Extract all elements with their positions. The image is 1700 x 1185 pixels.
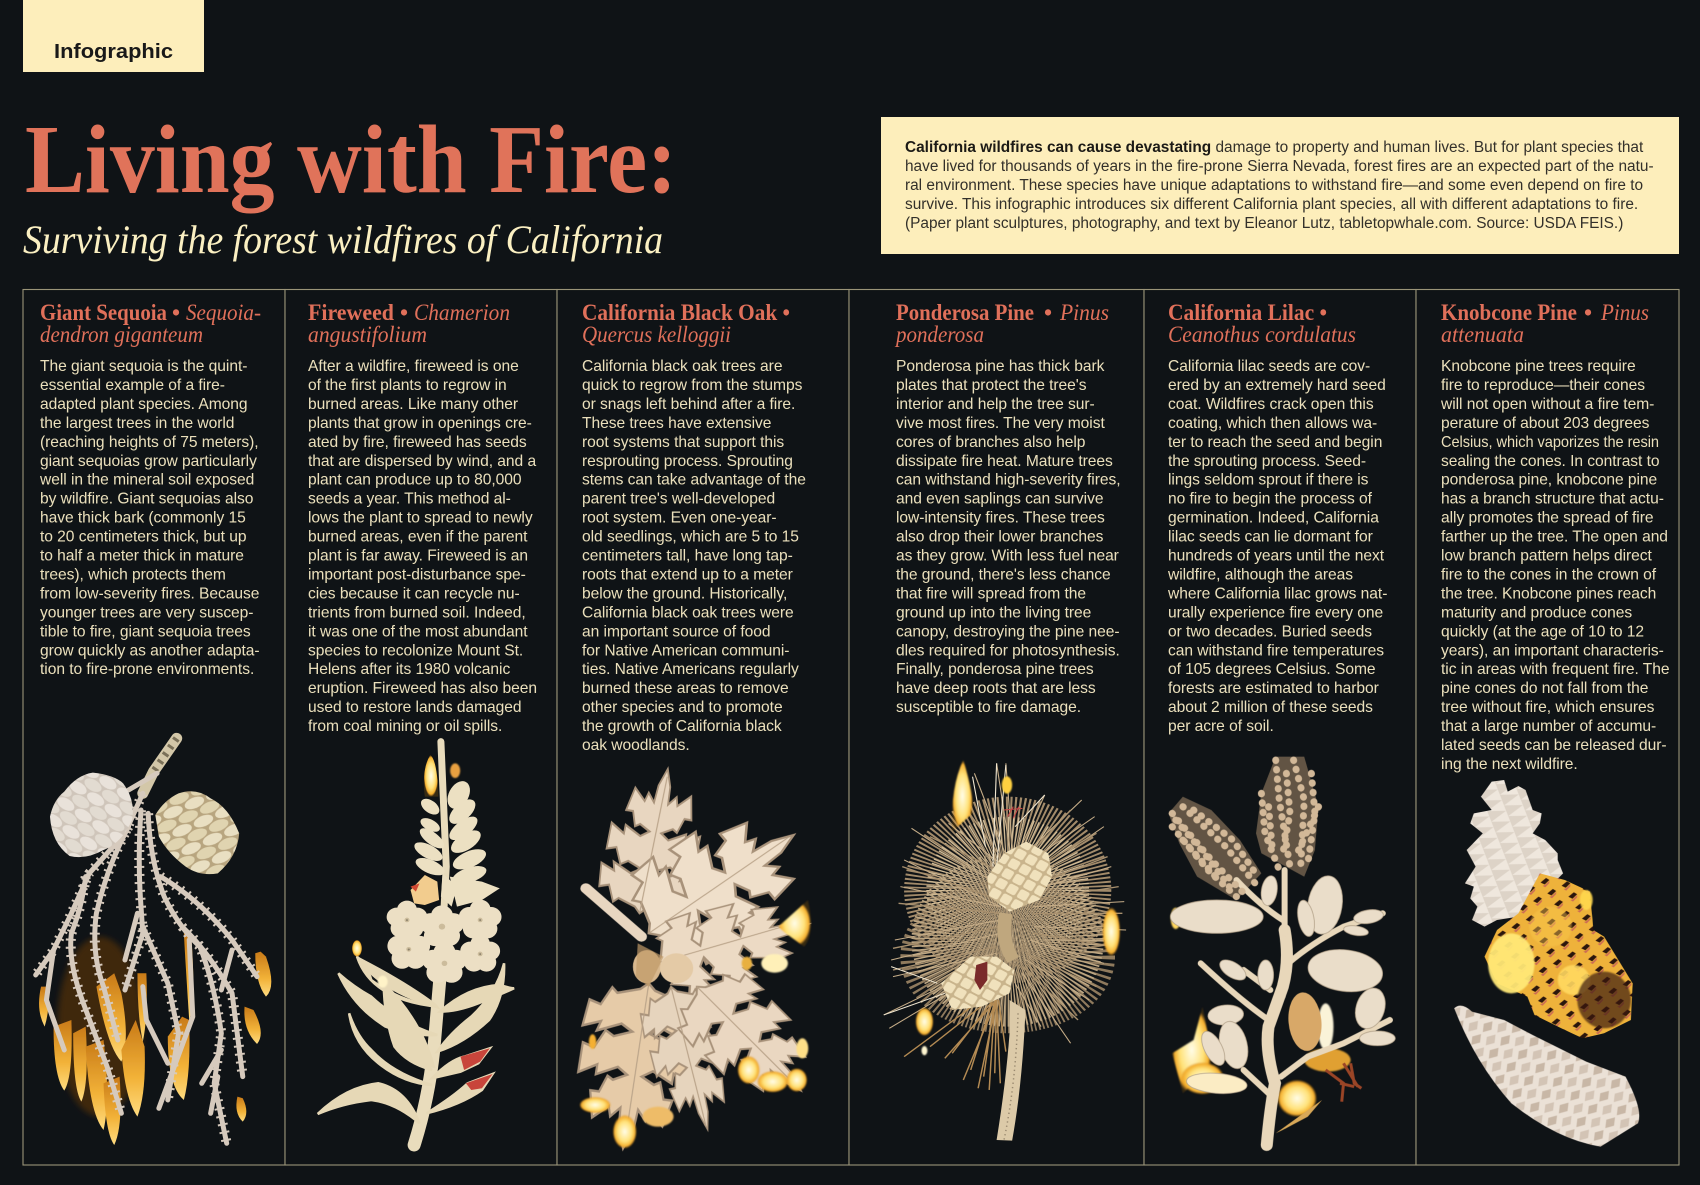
text: knobcone pine: that a large number of accumu- bbox=[1441, 718, 1656, 735]
heading: ponderosa pine: Ponderosa Pine bbox=[896, 300, 1034, 325]
text: california lilac: urally experience fire every one bbox=[1168, 604, 1383, 621]
text: giant sequoia: younger trees are very suscep- bbox=[40, 604, 253, 621]
text: ponderosa pine: as they grow. With less fuel near bbox=[896, 548, 1119, 564]
text: knobcone pine: will not open without a fire tem- bbox=[1440, 396, 1654, 413]
text: ponderosa pine: dles required for photosynthesis. bbox=[896, 642, 1120, 659]
text: giant sequoia: essential example of a fire- bbox=[40, 377, 225, 394]
text: california black oak: below the ground. Historically, bbox=[582, 585, 787, 602]
text: ponderosa pine: can withstand high-severity fires, bbox=[896, 472, 1121, 489]
text: california lilac: coat. Wildfires crack open this bbox=[1168, 396, 1374, 413]
heading: giant sequoia: Sequoia- bbox=[186, 300, 261, 325]
text: giant sequoia: the largest trees in the world bbox=[40, 415, 234, 432]
text: giant sequoia: have thick bark (commonly 15 bbox=[40, 510, 246, 527]
heading: knobcone pine: Knobcone Pine bbox=[1441, 300, 1577, 325]
text: california black oak: California black oak trees were bbox=[582, 604, 794, 621]
text: ponderosa pine: cores of branches also help bbox=[896, 434, 1086, 451]
text: california lilac: the sprouting process. Seed- bbox=[1168, 453, 1366, 470]
text: giant sequoia: tion to fire-prone environments. bbox=[40, 661, 254, 678]
text: knobcone pine: Celsius, which vaporizes the resin bbox=[1441, 434, 1659, 451]
text: fireweed: ated by fire, fireweed has seeds bbox=[308, 434, 527, 451]
text: giant sequoia: to 20 centimeters thick, but up bbox=[40, 529, 247, 546]
text: knobcone pine: ing the next wildfire. bbox=[1441, 756, 1578, 773]
text: california black oak: other species and to promote bbox=[582, 699, 783, 716]
text: california lilac: hundreds of years until the next bbox=[1168, 548, 1385, 564]
heading: fireweed: Fireweed bbox=[308, 300, 394, 325]
text: california black oak: burned these areas to remove bbox=[582, 680, 789, 697]
text: fireweed: used to restore lands damaged bbox=[308, 699, 522, 716]
text: ponderosa pine: Finally, ponderosa pine trees bbox=[896, 661, 1094, 678]
text: knobcone pine: ponderosa pine, knobcone pine bbox=[1441, 472, 1657, 489]
heading: knobcone pine: • bbox=[1584, 300, 1592, 325]
text: california black oak: for Native American communi- bbox=[582, 642, 789, 659]
heading: ponderosa pine: ponderosa bbox=[894, 322, 984, 347]
heading: california lilac: California Lilac • bbox=[1168, 300, 1327, 325]
heading: ponderosa pine: • bbox=[1044, 300, 1052, 325]
heading: knobcone pine bbox=[1441, 300, 1649, 347]
text: knobcone pine: tic in areas with frequent fire. The bbox=[1441, 661, 1669, 678]
text: california lilac: per acre of soil. bbox=[1168, 718, 1274, 735]
text: fireweed: that are dispersed by wind, and a bbox=[308, 453, 536, 470]
text: fireweed: burned areas, even if the parent bbox=[308, 529, 528, 546]
title: Living with Fire: bbox=[25, 106, 677, 213]
text: fireweed: from coal mining or oil spills. bbox=[308, 718, 502, 735]
intro callout bbox=[881, 117, 1679, 254]
text: ponderosa pine: plates that protect the tree's bbox=[896, 377, 1087, 394]
heading: ponderosa pine: Pinus bbox=[1059, 300, 1109, 325]
text: knobcone pine: maturity and produce cones bbox=[1441, 604, 1632, 621]
text: knobcone pine: low branch pattern helps direct bbox=[1441, 548, 1653, 564]
text: knobcone pine: ally promotes the spread of fire bbox=[1441, 510, 1654, 527]
text: california black oak: quick to regrow from the stumps bbox=[582, 377, 803, 394]
text: fireweed: important post-disturbance spe- bbox=[308, 566, 526, 583]
text: giant sequoia: trees), which protects them bbox=[40, 566, 226, 583]
text: california black oak: These trees have extensive bbox=[582, 415, 771, 432]
panel: california black oak bbox=[557, 290, 849, 1165]
panel: california lilac bbox=[1144, 290, 1416, 1165]
intro callout: (Paper plant sculptures, photography, and text by Eleanor Lutz, tabletopwhale.com. Source: USDA FEIS.) bbox=[905, 215, 1623, 232]
text: knobcone pine: perature of about 203 degrees bbox=[1441, 415, 1650, 432]
text: california black oak: root system. Even one-year- bbox=[582, 510, 777, 527]
text: california black oak: resprouting process. Sprouting bbox=[582, 453, 793, 470]
tag: Infographic bbox=[23, 0, 204, 72]
text: ponderosa pine: canopy, destroying the pine nee- bbox=[896, 623, 1120, 640]
text: fireweed: of the first plants to regrow in bbox=[308, 377, 507, 394]
text: fireweed: it was one of the most abundant bbox=[308, 623, 528, 640]
text: knobcone pine: Knobcone pine trees require bbox=[1441, 358, 1636, 375]
intro callout: ral environment. These species have unique adaptations to withstand fire—and some even depend on fire to bbox=[905, 177, 1643, 194]
text: fireweed: Helens after its 1980 volcanic bbox=[308, 661, 510, 678]
plant: knobcone pine cones bbox=[1454, 780, 1639, 1147]
plant: black oak leaves bbox=[564, 761, 836, 1156]
text: fireweed: seeds a year. This method al- bbox=[308, 491, 511, 508]
text: california lilac: ered by an extremely hard seed bbox=[1168, 377, 1386, 394]
text: ponderosa pine: dissipate fire heat. Mature trees bbox=[896, 453, 1113, 470]
panel: ponderosa pine bbox=[849, 290, 1144, 1165]
text: california lilac: germination. Indeed, California bbox=[1168, 510, 1379, 527]
text: knobcone pine: lated seeds can be released dur- bbox=[1441, 737, 1667, 754]
text: knobcone pine: tree without fire, which ensures bbox=[1441, 699, 1655, 716]
text: california black oak: roots that extend up to a meter bbox=[582, 566, 793, 583]
text: knobcone pine: farther up the tree. The open and bbox=[1441, 529, 1668, 546]
text: fireweed: species to recolonize Mount St. bbox=[308, 642, 523, 659]
plant: ponderosa pine bbox=[884, 760, 1126, 1141]
text: ponderosa pine: susceptible to fire damage. bbox=[896, 699, 1081, 716]
text: giant sequoia: to half a meter thick in mature bbox=[40, 548, 244, 564]
text: ponderosa pine: vive most fires. The very moist bbox=[896, 415, 1105, 432]
text: california black oak: the growth of California black bbox=[582, 718, 782, 735]
text: giant sequoia: from low-severity fires. Because bbox=[40, 585, 259, 602]
heading: california black oak: Quercus kelloggii bbox=[582, 322, 731, 347]
heading: california lilac bbox=[1168, 300, 1356, 347]
heading: california black oak: California Black Oak • bbox=[582, 300, 790, 325]
text: california lilac: lilac seeds can lie dormant for bbox=[1168, 529, 1373, 546]
text: ponderosa pine: low-intensity fires. These trees bbox=[896, 510, 1105, 527]
heading: fireweed: • bbox=[400, 300, 408, 325]
heading: fireweed bbox=[308, 300, 510, 347]
text: giant sequoia: by wildfire. Giant sequoias also bbox=[40, 491, 254, 508]
heading: giant sequoia bbox=[40, 300, 261, 347]
text: fireweed: plants that grow in openings cre- bbox=[308, 415, 532, 432]
text: ponderosa pine: and even saplings can survive bbox=[896, 491, 1103, 508]
heading: knobcone pine: Pinus bbox=[1600, 300, 1649, 325]
text: california black oak: root systems that support this bbox=[582, 434, 784, 451]
heading: giant sequoia: dendron giganteum bbox=[40, 322, 203, 347]
tag: Infographic: Infographic bbox=[54, 41, 173, 63]
panel: knobcone pine bbox=[1416, 290, 1679, 1165]
text: giant sequoia: adapted plant species. Among bbox=[40, 396, 248, 413]
heading: california black oak bbox=[582, 300, 790, 347]
text: giant sequoia: grow quickly as another adapta- bbox=[40, 642, 260, 659]
text: california black oak: centimeters tall, have long tap- bbox=[582, 548, 793, 564]
text: ponderosa pine: have deep roots that are less bbox=[896, 680, 1096, 697]
text: california black oak: oak woodlands. bbox=[582, 737, 690, 754]
text: california lilac: California lilac seeds are cov- bbox=[1168, 358, 1370, 375]
heading: ponderosa pine bbox=[894, 300, 1109, 347]
text: ponderosa pine: interior and help the tree sur- bbox=[896, 396, 1095, 413]
heading: fireweed: Chamerion bbox=[414, 300, 510, 325]
text: california black oak: an important source of food bbox=[582, 623, 770, 640]
text: california lilac: forests are estimated to harbor bbox=[1168, 680, 1379, 697]
text: ponderosa pine: also drop their lower branches bbox=[896, 529, 1104, 546]
text: ponderosa pine: that fire will spread from the bbox=[896, 585, 1086, 602]
text: california black oak: ties. Native Americans regularly bbox=[582, 661, 799, 678]
heading: california lilac: Ceanothus cordulatus bbox=[1168, 322, 1356, 347]
text: fireweed: cies because it can recycle nu- bbox=[308, 585, 520, 602]
text: california lilac: wildfire, although the areas bbox=[1167, 566, 1353, 583]
text: knobcone pine: years), an important characteris- bbox=[1441, 642, 1664, 659]
text: giant sequoia: well in the mineral soil exposed bbox=[39, 472, 254, 489]
text: california black oak: old seedlings, which are 5 to 15 bbox=[582, 529, 799, 546]
text: california lilac: coating, which then allows wa- bbox=[1168, 415, 1377, 432]
text: ponderosa pine: ground up into the living tree bbox=[896, 604, 1091, 621]
text: california lilac: or two decades. Buried seeds bbox=[1168, 623, 1372, 640]
plant: california lilac bbox=[1169, 757, 1395, 1145]
text: california lilac: about 2 million of these seeds bbox=[1168, 699, 1373, 716]
intro callout: California wildfires can cause devastating damage to property and human lives. But for plant species that bbox=[905, 139, 1644, 156]
plant: fireweed bbox=[318, 742, 514, 1145]
text: california black oak: stems can take advantage of the bbox=[582, 472, 806, 489]
text: california black oak: California black oak trees are bbox=[582, 358, 782, 375]
text: fireweed: trients from burned soil. Indeed, bbox=[308, 604, 526, 621]
text: knobcone pine: fire to the cones in the crown of bbox=[1441, 566, 1657, 583]
text: knobcone pine: has a branch structure that actu- bbox=[1441, 491, 1664, 508]
text: california lilac: lings seldom sprout if there is bbox=[1168, 472, 1369, 489]
text: ponderosa pine: the ground, there's less chance bbox=[896, 566, 1111, 583]
text: fireweed: eruption. Fireweed has also been bbox=[308, 680, 537, 697]
panel: fireweed bbox=[285, 290, 557, 1165]
text: knobcone pine: sealing the cones. In contrast to bbox=[1441, 453, 1660, 470]
text: giant sequoia: (reaching heights of 75 meters), bbox=[40, 434, 259, 451]
plant: giant sequoia branch with cones bbox=[36, 738, 271, 1145]
intro callout: have lived for thousands of years in the fire-prone Sierra Nevada, forest fires are an expected part of the natu- bbox=[905, 158, 1654, 175]
text: california black oak: parent tree's well-developed bbox=[582, 491, 775, 508]
text: knobcone pine: pine cones do not fall from the bbox=[1441, 680, 1648, 697]
text: california lilac: where California lilac grows nat- bbox=[1167, 585, 1387, 602]
heading: knobcone pine: attenuata bbox=[1441, 322, 1524, 347]
text: knobcone pine: quickly (at the age of 10 to 12 bbox=[1441, 623, 1644, 640]
text: california lilac: ter to reach the seed and begin bbox=[1168, 434, 1382, 451]
text: fireweed: burned areas. Like many other bbox=[308, 396, 518, 413]
heading: giant sequoia: Giant Sequoia bbox=[40, 300, 167, 325]
intro callout: survive. This infographic introduces six different California plant species, all with different adaptations to fire. bbox=[905, 196, 1638, 213]
text: fireweed: plant can produce up to 80,000 bbox=[308, 472, 522, 489]
heading: giant sequoia: • bbox=[172, 300, 180, 325]
heading: fireweed: angustifolium bbox=[308, 322, 427, 347]
text: fireweed: lows the plant to spread to newly bbox=[308, 510, 533, 527]
text: knobcone pine: fire to reproduce—their cones bbox=[1441, 377, 1645, 394]
text: giant sequoia: tible to fire, giant sequoia trees bbox=[40, 623, 251, 640]
subtitle: Surviving the forest wildfires of California bbox=[23, 217, 663, 262]
text: giant sequoia: giant sequoias grow particularly bbox=[40, 453, 257, 470]
text: ponderosa pine: Ponderosa pine has thick bark bbox=[896, 358, 1105, 375]
text: california black oak: or snags left behind after a fire. bbox=[582, 396, 795, 413]
text: fireweed: plant is far away. Fireweed is an bbox=[308, 548, 528, 564]
text: giant sequoia: The giant sequoia is the quint- bbox=[40, 358, 247, 375]
text: fireweed: After a wildfire, fireweed is one bbox=[308, 358, 519, 375]
text: knobcone pine: the tree. Knobcone pines reach bbox=[1441, 585, 1656, 602]
text: california lilac: no fire to begin the process of bbox=[1168, 491, 1373, 508]
panel: giant sequoia bbox=[23, 290, 285, 1165]
text: california lilac: can withstand fire temperatures bbox=[1168, 642, 1384, 659]
text: california lilac: of 105 degrees Celsius. Some bbox=[1168, 661, 1376, 678]
